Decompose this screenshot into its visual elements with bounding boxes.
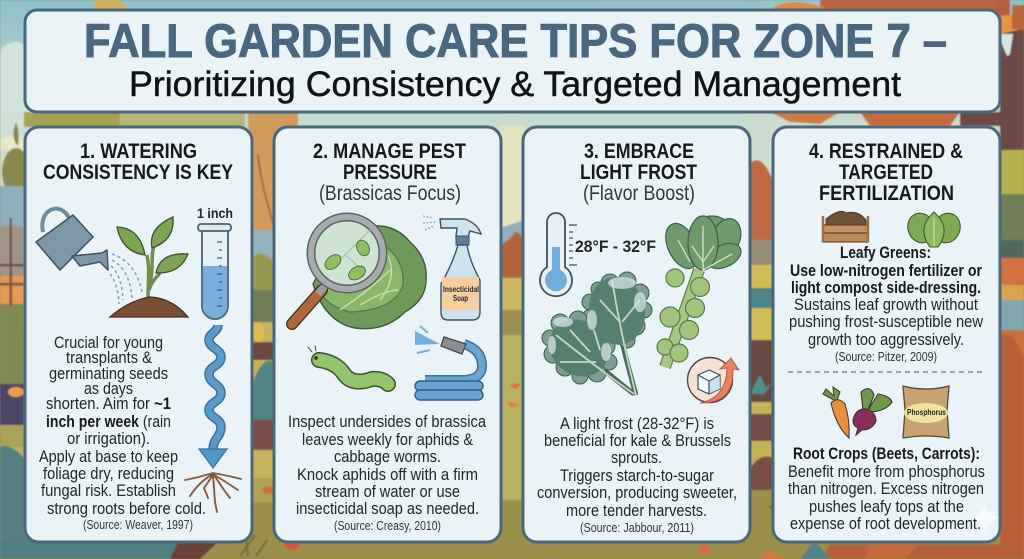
subtitle: Prioritizing Consistency & Targeted Management <box>129 65 901 104</box>
icon: sugar cube with rising arrow <box>688 358 739 403</box>
icon: watering can <box>36 209 108 270</box>
text: frost body <box>537 415 737 520</box>
text: root crops advice <box>788 445 985 533</box>
icon: insecticidal soap spray bottle <box>423 216 481 320</box>
text: pest body: leaves weekly for aphids & <box>302 431 473 449</box>
heading: restrained fertilization: FERTILIZATION <box>819 182 954 205</box>
text: watering body: Crucial for young <box>54 334 163 352</box>
heading: manage pest pressure <box>313 140 466 205</box>
text: pest body: cabbage worms. <box>334 448 441 466</box>
panel: 1 watering consistency <box>25 127 252 542</box>
icon: leafy greens <box>904 209 964 247</box>
text: pest body: stream of water or use <box>315 483 460 501</box>
text: pest body: Knock aphids off with a firm <box>297 466 478 484</box>
text: frost body: more tender harvests. <box>566 502 707 520</box>
text: leafy greens advice <box>789 244 983 349</box>
title banner <box>25 10 1000 112</box>
icon: phosphorus fertilizer bag: Phosphorus <box>907 407 946 417</box>
panel: 4 restrained and targeted fertilization <box>773 127 1000 542</box>
text: frost body: conversion, producing sweeter, <box>537 484 737 502</box>
text: watering body: transplants & <box>66 349 152 367</box>
text: watering body: inch per week (rain <box>46 413 171 431</box>
icon: sparkle watermark <box>970 503 1000 533</box>
icon: frosted kale <box>538 272 652 395</box>
icon: thermometer with temperature range <box>540 213 656 296</box>
source: Creasy: (Source: Creasy, 2010) <box>334 519 441 533</box>
text: watering body: as days <box>84 380 133 398</box>
heading: restrained fertilization: 4. RESTRAINED & <box>809 140 963 163</box>
heading: embrace light frost: LIGHT FROST <box>580 161 697 184</box>
text: frost body: Triggers starch-to-sugar <box>560 467 714 485</box>
panel: 3 embrace light frost <box>523 127 750 542</box>
text: watering body: strong roots before cold. <box>47 500 206 518</box>
heading: embrace light frost: 3. EMBRACE <box>584 140 694 163</box>
heading: embrace light frost <box>580 140 697 205</box>
text: leafy greens advice: growth too aggressively. <box>808 331 964 349</box>
source: Jabbour: (Source: Jabbour, 2011) <box>580 521 694 535</box>
icon: carrot <box>823 387 849 438</box>
icon: cabbage under magnifying glass <box>292 217 426 329</box>
icon: compost crate <box>823 211 868 242</box>
source: Pitzer: (Source: Pitzer, 2009) <box>835 350 937 364</box>
text: leafy greens advice: light compost side-dressing. <box>791 279 981 297</box>
text: frost body: beneficial for kale & Brussels <box>544 432 731 450</box>
icon: thermometer with temperature range: 28°F - 32°F <box>575 237 656 256</box>
heading: watering consistency: CONSISTENCY IS KEY <box>43 161 233 184</box>
heading: embrace light frost: (Flavor Boost) <box>583 182 695 205</box>
panel: 2 manage pest pressure <box>274 127 501 542</box>
heading: watering consistency: 1. WATERING <box>80 140 197 163</box>
source: Weaver: (Source: Weaver, 1997) <box>83 518 193 532</box>
text: root crops advice: expense of root development. <box>790 515 981 533</box>
heading: manage pest pressure: 2. MANAGE PEST <box>313 140 466 163</box>
text: watering body <box>39 334 206 518</box>
text: root crops advice: Root Crops (Beets, Carrots): <box>793 445 980 463</box>
icon: cabbage worm <box>308 346 388 384</box>
text: leafy greens advice: Leafy Greens: <box>840 244 931 262</box>
text: watering body: or irrigation). <box>67 430 150 448</box>
icon: insecticidal soap spray bottle: Insecticidal <box>443 284 479 294</box>
text: pest body: insecticidal soap as needed. <box>296 500 479 518</box>
text: pest body: Inspect undersides of brassica <box>288 413 487 431</box>
text: root crops advice: than nitrogen. Excess nitrogen <box>788 480 984 498</box>
text: frost body: A light frost (28-32°F) is <box>560 415 714 433</box>
text: watering body: shorten. Aim for ~1 <box>46 395 171 413</box>
icon: beet <box>853 389 892 435</box>
icon: garden hose with water jet <box>415 326 483 400</box>
text: watering body: Apply at base to keep <box>39 448 178 466</box>
icon: insecticidal soap spray bottle: Soap <box>453 293 468 303</box>
heading: restrained fertilization: TARGETED <box>839 161 933 184</box>
text: root crops advice: Benefit more from phosphorus <box>788 463 985 481</box>
icon: rain gauge tube <box>197 205 233 319</box>
text: leafy greens advice: pushing frost-susceptible new <box>789 313 983 331</box>
text: root crops advice: pushes leafy tops at the <box>809 498 964 516</box>
text: leafy greens advice: Use low-nitrogen fertilizer or <box>790 262 982 280</box>
text: leafy greens advice: Sustains leaf growth without <box>794 296 978 314</box>
heading: manage pest pressure: (Brassicas Focus) <box>319 182 461 205</box>
text: watering body: germinating seeds <box>49 365 168 383</box>
heading: watering consistency <box>43 140 233 184</box>
icon: roots <box>185 473 241 512</box>
icon: water drops <box>110 254 142 304</box>
text: pest body <box>288 413 487 518</box>
heading: manage pest pressure: PRESSURE <box>343 161 437 184</box>
heading: restrained fertilization <box>809 140 963 205</box>
text: watering body: foliage dry, reducing <box>43 465 174 483</box>
text: frost body: sprouts. <box>611 449 662 467</box>
icon: brussels sprouts stalk <box>657 214 746 367</box>
main title: FALL GARDEN CARE TIPS FOR ZONE 7 – <box>84 14 947 67</box>
icon: rain gauge tube: 1 inch <box>197 205 233 221</box>
icon: seedling in soil <box>110 217 188 317</box>
icon: phosphorus fertilizer bag <box>903 386 949 438</box>
arrow: wavy water arrow to roots <box>199 325 227 468</box>
text: watering body: fungal risk. Establish <box>41 482 176 500</box>
